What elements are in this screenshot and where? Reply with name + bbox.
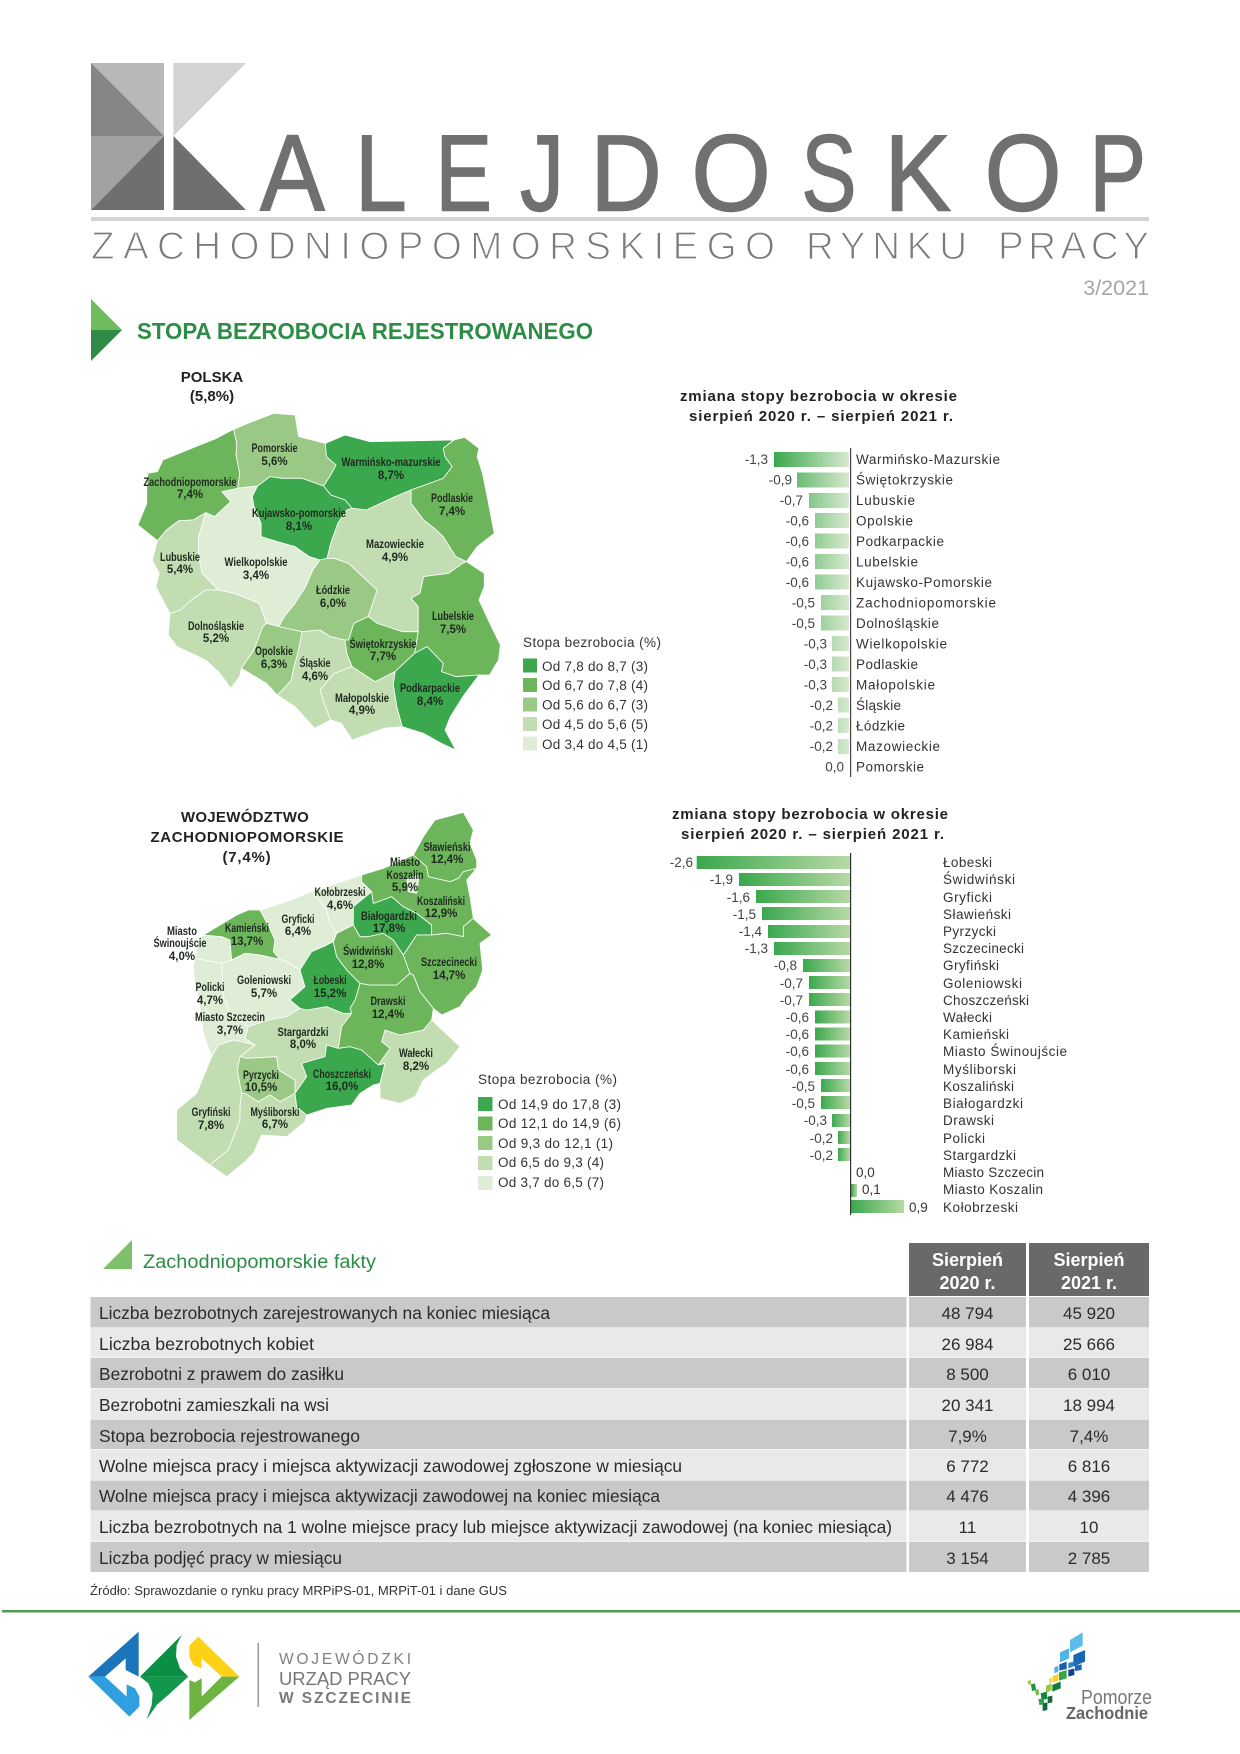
map labels: Zachodniopomorskie: 5,7% (251, 988, 277, 1000)
bar chart: zmiana stopy, voivodeships: -0,2 (810, 739, 833, 754)
bar chart: zmiana stopy, districts: -1,3 (745, 941, 768, 956)
table header: 2021 r. (1061, 1273, 1117, 1293)
heading: Zachodniopomorskie: (7,4%) (223, 849, 271, 866)
map labels: Zachodniopomorskie: Koszalin (386, 870, 424, 882)
map labels: Zachodniopomorskie: 4,7% (197, 995, 223, 1007)
bar chart: zmiana stopy, districts: 0,9 (909, 1200, 928, 1215)
table rows: 3 154 (946, 1549, 989, 1568)
map labels: Zachodniopomorskie: Drawski (370, 996, 406, 1008)
subtitle: RYNKU (806, 225, 967, 268)
map labels: Zachodniopomorskie: 4,0% (169, 951, 195, 963)
table rows: Wolne miejsca pracy i miejsca aktywizacji zawodowej zgłoszone w miesiącu (99, 1456, 682, 1476)
map labels: Zachodniopomorskie: 6,4% (285, 926, 311, 938)
map labels: Zachodniopomorskie: Sławieński (424, 842, 470, 854)
legend: Polska: Od 7,8 do 8,7 (3) (542, 659, 648, 674)
bar chart: zmiana stopy, districts: Gryficki (943, 890, 992, 905)
bar chart: zmiana stopy, voivodeships: Podkarpackie (856, 534, 944, 549)
table header: Sierpień (932, 1250, 1003, 1270)
icon: facts triangle (103, 1240, 132, 1269)
subtitle: ZACHODNIOPOMORSKIEGO (91, 225, 775, 268)
bar chart: zmiana stopy, voivodeships: -0,6 (786, 534, 809, 549)
map labels: Polska: Zachodniopomorskie (144, 477, 236, 489)
logo text: Pomorze Zachodnie: Pomorze (1081, 1687, 1152, 1709)
map labels: Zachodniopomorskie: 12,4% (431, 854, 463, 866)
icon: section triangle (91, 299, 122, 361)
icon: kalejdoskop K logo (91, 63, 246, 210)
bar chart: zmiana stopy, districts: -2,6 (670, 855, 693, 870)
bar chart: zmiana stopy, districts: Pyrzycki (943, 924, 996, 939)
map labels: Zachodniopomorskie: Szczecinecki (421, 957, 477, 969)
map labels: Zachodniopomorskie: 5,9% (392, 882, 418, 894)
footer rule (2, 1610, 1240, 1612)
bar chart: zmiana stopy, voivodeships: -0,3 (804, 657, 827, 672)
map labels: Polska: 6,3% (261, 659, 287, 671)
bar chart: zmiana stopy, voivodeships: Pomorskie (856, 760, 924, 774)
bar chart: zmiana stopy, districts: Myśliborski (943, 1062, 1016, 1077)
heading: Zachodniopomorskie fakty: Zachodniopomorskie fakty (143, 1252, 377, 1273)
bar chart: zmiana stopy, voivodeships: Śląskie (856, 698, 901, 713)
map labels: Zachodniopomorskie: 12,4% (372, 1009, 404, 1021)
heading: Polska: (5,8%) (190, 388, 234, 405)
heading: Polska (181, 369, 243, 405)
logo text: Wojewódzki Urząd Pracy: URZĄD PRACY (279, 1668, 411, 1689)
source note: Źródło: Sprawozdanie o rynku pracy MRPiPS-01, MRPiT-01 i dane GUS (90, 1583, 507, 1598)
table rows: 26 984 (942, 1335, 994, 1354)
bar chart: zmiana stopy, voivodeships: Łódzkie (856, 718, 905, 734)
table rows: Liczba bezrobotnych zarejestrowanych na koniec miesiąca (99, 1303, 550, 1323)
map: Zachodniopomorskie districts (154, 812, 492, 1177)
table rows: 7,4% (1070, 1427, 1108, 1446)
logo text: Pomorze Zachodnie (1066, 1687, 1152, 1723)
map labels: Zachodniopomorskie: 14,7% (433, 970, 465, 982)
table rows: 6 772 (946, 1457, 989, 1476)
bar chart: zmiana stopy, districts: Miasto Świnoujście (943, 1044, 1067, 1059)
logo text: Wojewódzki Urząd Pracy: W SZCZECINIE (279, 1690, 411, 1707)
legend: Zachodniopomorskie: Od 12,1 do 14,9 (6) (498, 1116, 621, 1131)
legend: Polska (523, 635, 661, 752)
bar chart: zmiana stopy, districts: -0,5 (792, 1096, 815, 1111)
bar chart: zmiana stopy, voivodeships: -0,9 (769, 472, 792, 488)
map labels: Zachodniopomorskie: Miasto Szczecin (195, 1012, 265, 1024)
map labels: Polska: Łódzkie (316, 585, 350, 597)
bar chart: zmiana stopy, districts: Choszczeński (943, 993, 1029, 1008)
map labels: Polska: 5,4% (167, 564, 193, 576)
legend: Zachodniopomorskie: Od 6,5 do 9,3 (4) (498, 1155, 604, 1170)
map labels: Polska: 7,4% (439, 506, 465, 518)
map labels: Polska: Lubelskie (432, 611, 474, 623)
map labels: Polska: 4,9% (349, 705, 375, 717)
map labels: Polska: Kujawsko-pomorskie (252, 508, 346, 520)
bar chart: zmiana stopy, voivodeships: Kujawsko-Pomorskie (856, 575, 992, 590)
heading: stopa bezrobocia: STOPA BEZROBOCIA REJESTROWANEGO (137, 318, 593, 344)
title: Kalejdoskop: J (520, 113, 564, 235)
bar chart: zmiana stopy, voivodeships: -0,2 (810, 698, 833, 713)
map labels: Zachodniopomorskie: 13,7% (231, 936, 263, 948)
bar chart: zmiana stopy, voivodeships: -0,5 (792, 616, 815, 631)
map labels: Zachodniopomorskie: 15,2% (314, 988, 346, 1000)
bar chart: zmiana stopy, districts: Stargardzki (943, 1148, 1016, 1163)
map labels: Polska: 8,4% (417, 696, 443, 708)
map labels: Zachodniopomorskie: 12,8% (352, 959, 384, 971)
logo separator (258, 1643, 259, 1707)
table header: Sierpień (1053, 1250, 1125, 1270)
bar chart: zmiana stopy, districts: -0,8 (774, 958, 797, 973)
map labels: Polska: 5,2% (203, 633, 229, 645)
map labels: Zachodniopomorskie: Policki (196, 982, 224, 994)
table rows: 18 994 (1063, 1396, 1115, 1415)
table rows (90, 1297, 1149, 1572)
table rows: 10 (1080, 1518, 1098, 1537)
map labels: Zachodniopomorskie: 8,0% (290, 1039, 316, 1051)
table rows: 20 341 (942, 1396, 994, 1415)
bar chart: zmiana stopy, districts: -0,7 (780, 993, 803, 1008)
map labels: Zachodniopomorskie: Pyrzycki (243, 1070, 279, 1082)
map labels: Zachodniopomorskie: 6,7% (262, 1119, 288, 1131)
title: Kalejdoskop: P (1089, 112, 1146, 234)
bar chart: zmiana stopy, districts: Kołobrzeski (943, 1200, 1018, 1215)
table header (909, 1243, 1149, 1296)
bar chart: zmiana stopy, voivodeships: Warmińsko-Mazurskie (856, 452, 1000, 467)
chart title: zmiana stopy, districts: sierpień 2020 r. – sierpień 2021 r. (681, 826, 944, 843)
issue number: 3/2021 (1083, 276, 1149, 300)
map labels: Polska: Pomorskie (252, 443, 298, 455)
bar chart: zmiana stopy, districts: Koszaliński (943, 1079, 1014, 1094)
map labels: Zachodniopomorskie: Goleniowski (237, 975, 291, 987)
title: Kalejdoskop (260, 111, 1146, 235)
map labels: Zachodniopomorskie: Świnoujście (154, 937, 206, 950)
logo text: Wojewódzki Urząd Pracy: WOJEWÓDZKI (279, 1651, 411, 1668)
bar chart: zmiana stopy, districts: -0,6 (786, 1044, 809, 1059)
map labels: Polska: Mazowieckie (366, 539, 424, 551)
legend: Polska: Od 3,4 do 4,5 (1) (542, 737, 648, 752)
bar chart: zmiana stopy, voivodeships: -0,3 (804, 636, 827, 652)
table rows: 45 920 (1063, 1304, 1115, 1323)
bar chart: zmiana stopy, voivodeships: -0,6 (786, 514, 809, 528)
bar chart: zmiana stopy, districts: Kamieński (943, 1027, 1009, 1042)
bar chart: zmiana stopy, districts: Wałecki (943, 1010, 992, 1025)
heading: Polska: POLSKA (181, 369, 243, 386)
table rows: 2 785 (1068, 1549, 1110, 1568)
bar chart: zmiana stopy, districts: Szczecinecki (943, 941, 1024, 956)
subtitle (91, 225, 1149, 268)
bar chart: zmiana stopy, voivodeships: Mazowieckie (856, 739, 940, 754)
bar chart: zmiana stopy, districts: -0,6 (786, 1010, 809, 1025)
legend: Zachodniopomorskie: Stopa bezrobocia (%) (478, 1072, 617, 1087)
header rule (91, 217, 1149, 221)
table: Zachodniopomorskie fakty (90, 1243, 1149, 1572)
bar chart: zmiana stopy, districts: -0,3 (804, 1113, 827, 1128)
bar chart: zmiana stopy, districts: -0,2 (810, 1148, 833, 1163)
bar chart: zmiana stopy, voivodeships: -0,7 (780, 493, 803, 508)
table rows: 25 666 (1063, 1335, 1115, 1354)
map labels: Zachodniopomorskie: Wałecki (399, 1048, 433, 1060)
bar chart: zmiana stopy, districts (670, 853, 1067, 1215)
heading: Zachodniopomorskie: ZACHODNIOPOMORSKIE (150, 829, 344, 846)
map labels: Zachodniopomorskie: 8,2% (403, 1061, 429, 1073)
title: Kalejdoskop: K (884, 113, 951, 234)
map labels: Zachodniopomorskie: Kamieński (225, 923, 269, 935)
map labels: Polska: 7,5% (440, 624, 466, 636)
table rows: Bezrobotni z prawem do zasiłku (99, 1364, 344, 1384)
map labels: Zachodniopomorskie: Świdwiński (343, 945, 393, 958)
legend: Zachodniopomorskie: Od 14,9 do 17,8 (3) (498, 1097, 621, 1112)
table rows: Liczba podjęć pracy w miesiącu (99, 1548, 342, 1568)
map labels: Zachodniopomorskie: 7,8% (198, 1120, 224, 1132)
bar chart: zmiana stopy, districts: -0,7 (780, 976, 803, 991)
table rows: 7,9% (948, 1427, 987, 1446)
table rows: Liczba bezrobotnych kobiet (99, 1334, 314, 1354)
bar chart: zmiana stopy, districts: -0,6 (786, 1062, 809, 1077)
bar chart: zmiana stopy, voivodeships: Lubuskie (856, 493, 915, 508)
map labels: Zachodniopomorskie: 4,6% (327, 900, 353, 912)
bar chart: zmiana stopy, voivodeships: -1,3 (745, 452, 768, 467)
map labels: Polska: Warmińsko-mazurskie (342, 457, 440, 469)
map labels: Zachodniopomorskie (154, 842, 477, 1132)
bar chart: zmiana stopy, voivodeships: Małopolskie (856, 678, 935, 692)
map labels: Zachodniopomorskie: Myśliborski (250, 1107, 300, 1119)
map labels: Polska: 5,6% (261, 456, 288, 468)
map: Polska voivodeships (138, 413, 500, 750)
legend: Polska: Stopa bezrobocia (%) (523, 635, 661, 650)
table rows: 4 476 (946, 1487, 989, 1506)
logo text: Wojewódzki Urząd Pracy (279, 1651, 411, 1707)
bar chart: zmiana stopy, districts: -0,2 (810, 1131, 833, 1146)
map labels: Polska: 4,9% (382, 552, 408, 564)
bar chart: zmiana stopy, districts: Białogardzki (943, 1096, 1023, 1111)
bar chart: zmiana stopy, voivodeships: Podlaskie (856, 657, 918, 672)
map labels: Zachodniopomorskie: Stargardzki (278, 1027, 328, 1039)
map labels: Polska: Świętokrzyskie (350, 638, 416, 651)
map labels: Zachodniopomorskie: 10,5% (245, 1082, 277, 1094)
table rows: 6 010 (1068, 1365, 1110, 1384)
icon: Pomorze Zachodnie logo (1027, 1632, 1085, 1711)
bar chart: zmiana stopy, districts: -0,5 (792, 1079, 815, 1094)
map labels: Polska: Wielkopolskie (224, 557, 288, 569)
table rows: 8 500 (946, 1365, 989, 1384)
map labels: Zachodniopomorskie: 12,9% (425, 908, 457, 920)
map labels: Polska: Lubuskie (160, 552, 200, 564)
map labels: Polska: Śląskie (300, 657, 330, 670)
chart title: zmiana stopy, districts (672, 806, 948, 843)
bar chart: zmiana stopy, districts: Miasto Koszalin (943, 1182, 1043, 1197)
map labels: Zachodniopomorskie: Łobeski (314, 975, 346, 987)
heading: Zachodniopomorskie: WOJEWÓDZTWO (181, 808, 309, 826)
legend: Zachodniopomorskie (478, 1072, 621, 1190)
map labels: Zachodniopomorskie: Białogardzki (361, 911, 417, 923)
map labels: Polska: Podlaskie (431, 493, 473, 505)
map labels: Polska: Małopolskie (335, 693, 389, 705)
title: Kalejdoskop: A (260, 112, 325, 234)
table rows: Wolne miejsca pracy i miejsca aktywizacji zawodowej na koniec miesiąca (99, 1486, 660, 1506)
table rows: Bezrobotni zamieszkali na wsi (99, 1395, 329, 1415)
bar chart: zmiana stopy, districts: Świdwiński (943, 872, 1015, 887)
map labels: Zachodniopomorskie: Gryfiński (192, 1107, 230, 1119)
map labels: Polska: 7,4% (177, 489, 203, 501)
map labels: Polska: 7,7% (370, 651, 396, 663)
map labels: Zachodniopomorskie: Choszczeński (313, 1069, 371, 1081)
subtitle: PRACY (998, 225, 1149, 268)
legend: Zachodniopomorskie: Od 9,3 do 12,1 (1) (498, 1136, 613, 1151)
bar chart: zmiana stopy, districts: 0,1 (862, 1182, 881, 1197)
bar chart: zmiana stopy, districts: -1,5 (733, 907, 756, 922)
bar chart: zmiana stopy, voivodeships: -0,5 (792, 596, 815, 610)
title: Kalejdoskop: E (435, 112, 492, 234)
table rows: Stopa bezrobocia rejestrowanego (99, 1426, 360, 1446)
table header: 2020 r. (939, 1273, 996, 1293)
bar chart: zmiana stopy, districts: Gryfiński (943, 958, 999, 973)
map labels: Zachodniopomorskie: 3,7% (217, 1025, 243, 1037)
icon: WUP logo (88, 1632, 239, 1720)
table rows: Liczba bezrobotnych na 1 wolne miejsce pracy lub miejsce aktywizacji zawodowej (na koniec miesiąca) (99, 1517, 892, 1537)
bar chart: zmiana stopy, districts: Sławieński (943, 907, 1011, 922)
heading: Zachodniopomorskie (150, 808, 344, 866)
title: Kalejdoskop: O (691, 113, 771, 234)
bar chart: zmiana stopy, districts: Policki (943, 1131, 985, 1146)
legend: Polska: Od 6,7 do 7,8 (4) (542, 678, 648, 693)
map labels: Zachodniopomorskie: Miasto (167, 926, 197, 938)
map labels: Zachodniopomorskie: Kołobrzeski (314, 887, 366, 899)
table rows: 4 396 (1068, 1487, 1110, 1506)
map labels: Polska: Opolskie (255, 646, 293, 658)
chart title: zmiana stopy, voivodeships (680, 388, 957, 425)
bar chart: zmiana stopy, voivodeships (745, 448, 1000, 777)
legend: Zachodniopomorskie: Od 3,7 do 6,5 (7) (498, 1175, 604, 1190)
bar chart: zmiana stopy, voivodeships: Zachodniopomorskie (856, 596, 996, 610)
map labels: Polska: 4,6% (302, 671, 328, 683)
bar chart: zmiana stopy, voivodeships: -0,3 (804, 678, 827, 692)
bar chart: zmiana stopy, districts: -0,6 (786, 1027, 809, 1042)
chart title: zmiana stopy, voivodeships: sierpień 2020 r. – sierpień 2021 r. (689, 408, 953, 425)
bar chart: zmiana stopy, voivodeships: -0,6 (786, 554, 809, 570)
map labels: Polska: 3,4% (243, 570, 269, 582)
table rows: 48 794 (942, 1304, 994, 1323)
table rows: 11 (959, 1518, 976, 1537)
bar chart: zmiana stopy, districts: Miasto Szczecin (943, 1165, 1044, 1180)
legend: Polska: Od 4,5 do 5,6 (5) (542, 717, 648, 732)
map labels: Polska: 8,1% (286, 521, 312, 533)
title: Kalejdoskop: D (590, 113, 662, 235)
bar chart: zmiana stopy, voivodeships: Dolnośląskie (856, 616, 939, 631)
map labels: Polska: 8,7% (378, 470, 404, 482)
bar chart: zmiana stopy, voivodeships: 0,0 (825, 760, 844, 774)
title: Kalejdoskop: L (355, 112, 407, 234)
bar chart: zmiana stopy, districts: -1,6 (727, 890, 750, 905)
map labels: Zachodniopomorskie: Koszaliński (417, 896, 465, 908)
map labels: Polska: 6,0% (320, 598, 346, 610)
bar chart: zmiana stopy, districts: -1,9 (710, 872, 733, 887)
legend: Polska: Od 5,6 do 6,7 (3) (542, 698, 648, 712)
bar chart: zmiana stopy, voivodeships: -0,2 (810, 718, 833, 734)
logo text: Pomorze Zachodnie: Zachodnie (1066, 1703, 1148, 1723)
map labels: Polska: Dolnośląskie (188, 621, 244, 633)
bar chart: zmiana stopy, districts: Drawski (943, 1113, 994, 1128)
bar chart: zmiana stopy, voivodeships: Świętokrzyskie (856, 472, 953, 488)
title: Kalejdoskop: S (801, 111, 856, 234)
map labels: Polska: Podkarpackie (400, 683, 460, 695)
map labels: Zachodniopomorskie: Miasto (390, 857, 420, 869)
map labels: Zachodniopomorskie: 17,8% (373, 923, 405, 935)
map labels: Zachodniopomorskie: 16,0% (326, 1081, 358, 1093)
map labels: Polska (144, 443, 474, 717)
table rows: 6 816 (1068, 1457, 1110, 1476)
chart title: zmiana stopy, voivodeships: zmiana stopy bezrobocia w okresie (680, 388, 957, 405)
chart title: zmiana stopy, districts: zmiana stopy bezrobocia w okresie (672, 806, 948, 823)
title: Kalejdoskop: O (984, 113, 1062, 235)
map labels: Zachodniopomorskie: Gryficki (282, 914, 314, 926)
bar chart: zmiana stopy, voivodeships: Wielkopolskie (856, 636, 947, 652)
bar chart: zmiana stopy, voivodeships: Opolskie (856, 514, 913, 528)
bar chart: zmiana stopy, voivodeships: Lubelskie (856, 554, 918, 570)
bar chart: zmiana stopy, districts: Goleniowski (943, 976, 1022, 991)
bar chart: zmiana stopy, districts: -1,4 (739, 924, 762, 939)
bar chart: zmiana stopy, voivodeships: -0,6 (786, 575, 809, 590)
bar chart: zmiana stopy, districts: 0,0 (856, 1165, 875, 1180)
bar chart: zmiana stopy, districts: Łobeski (943, 855, 992, 870)
